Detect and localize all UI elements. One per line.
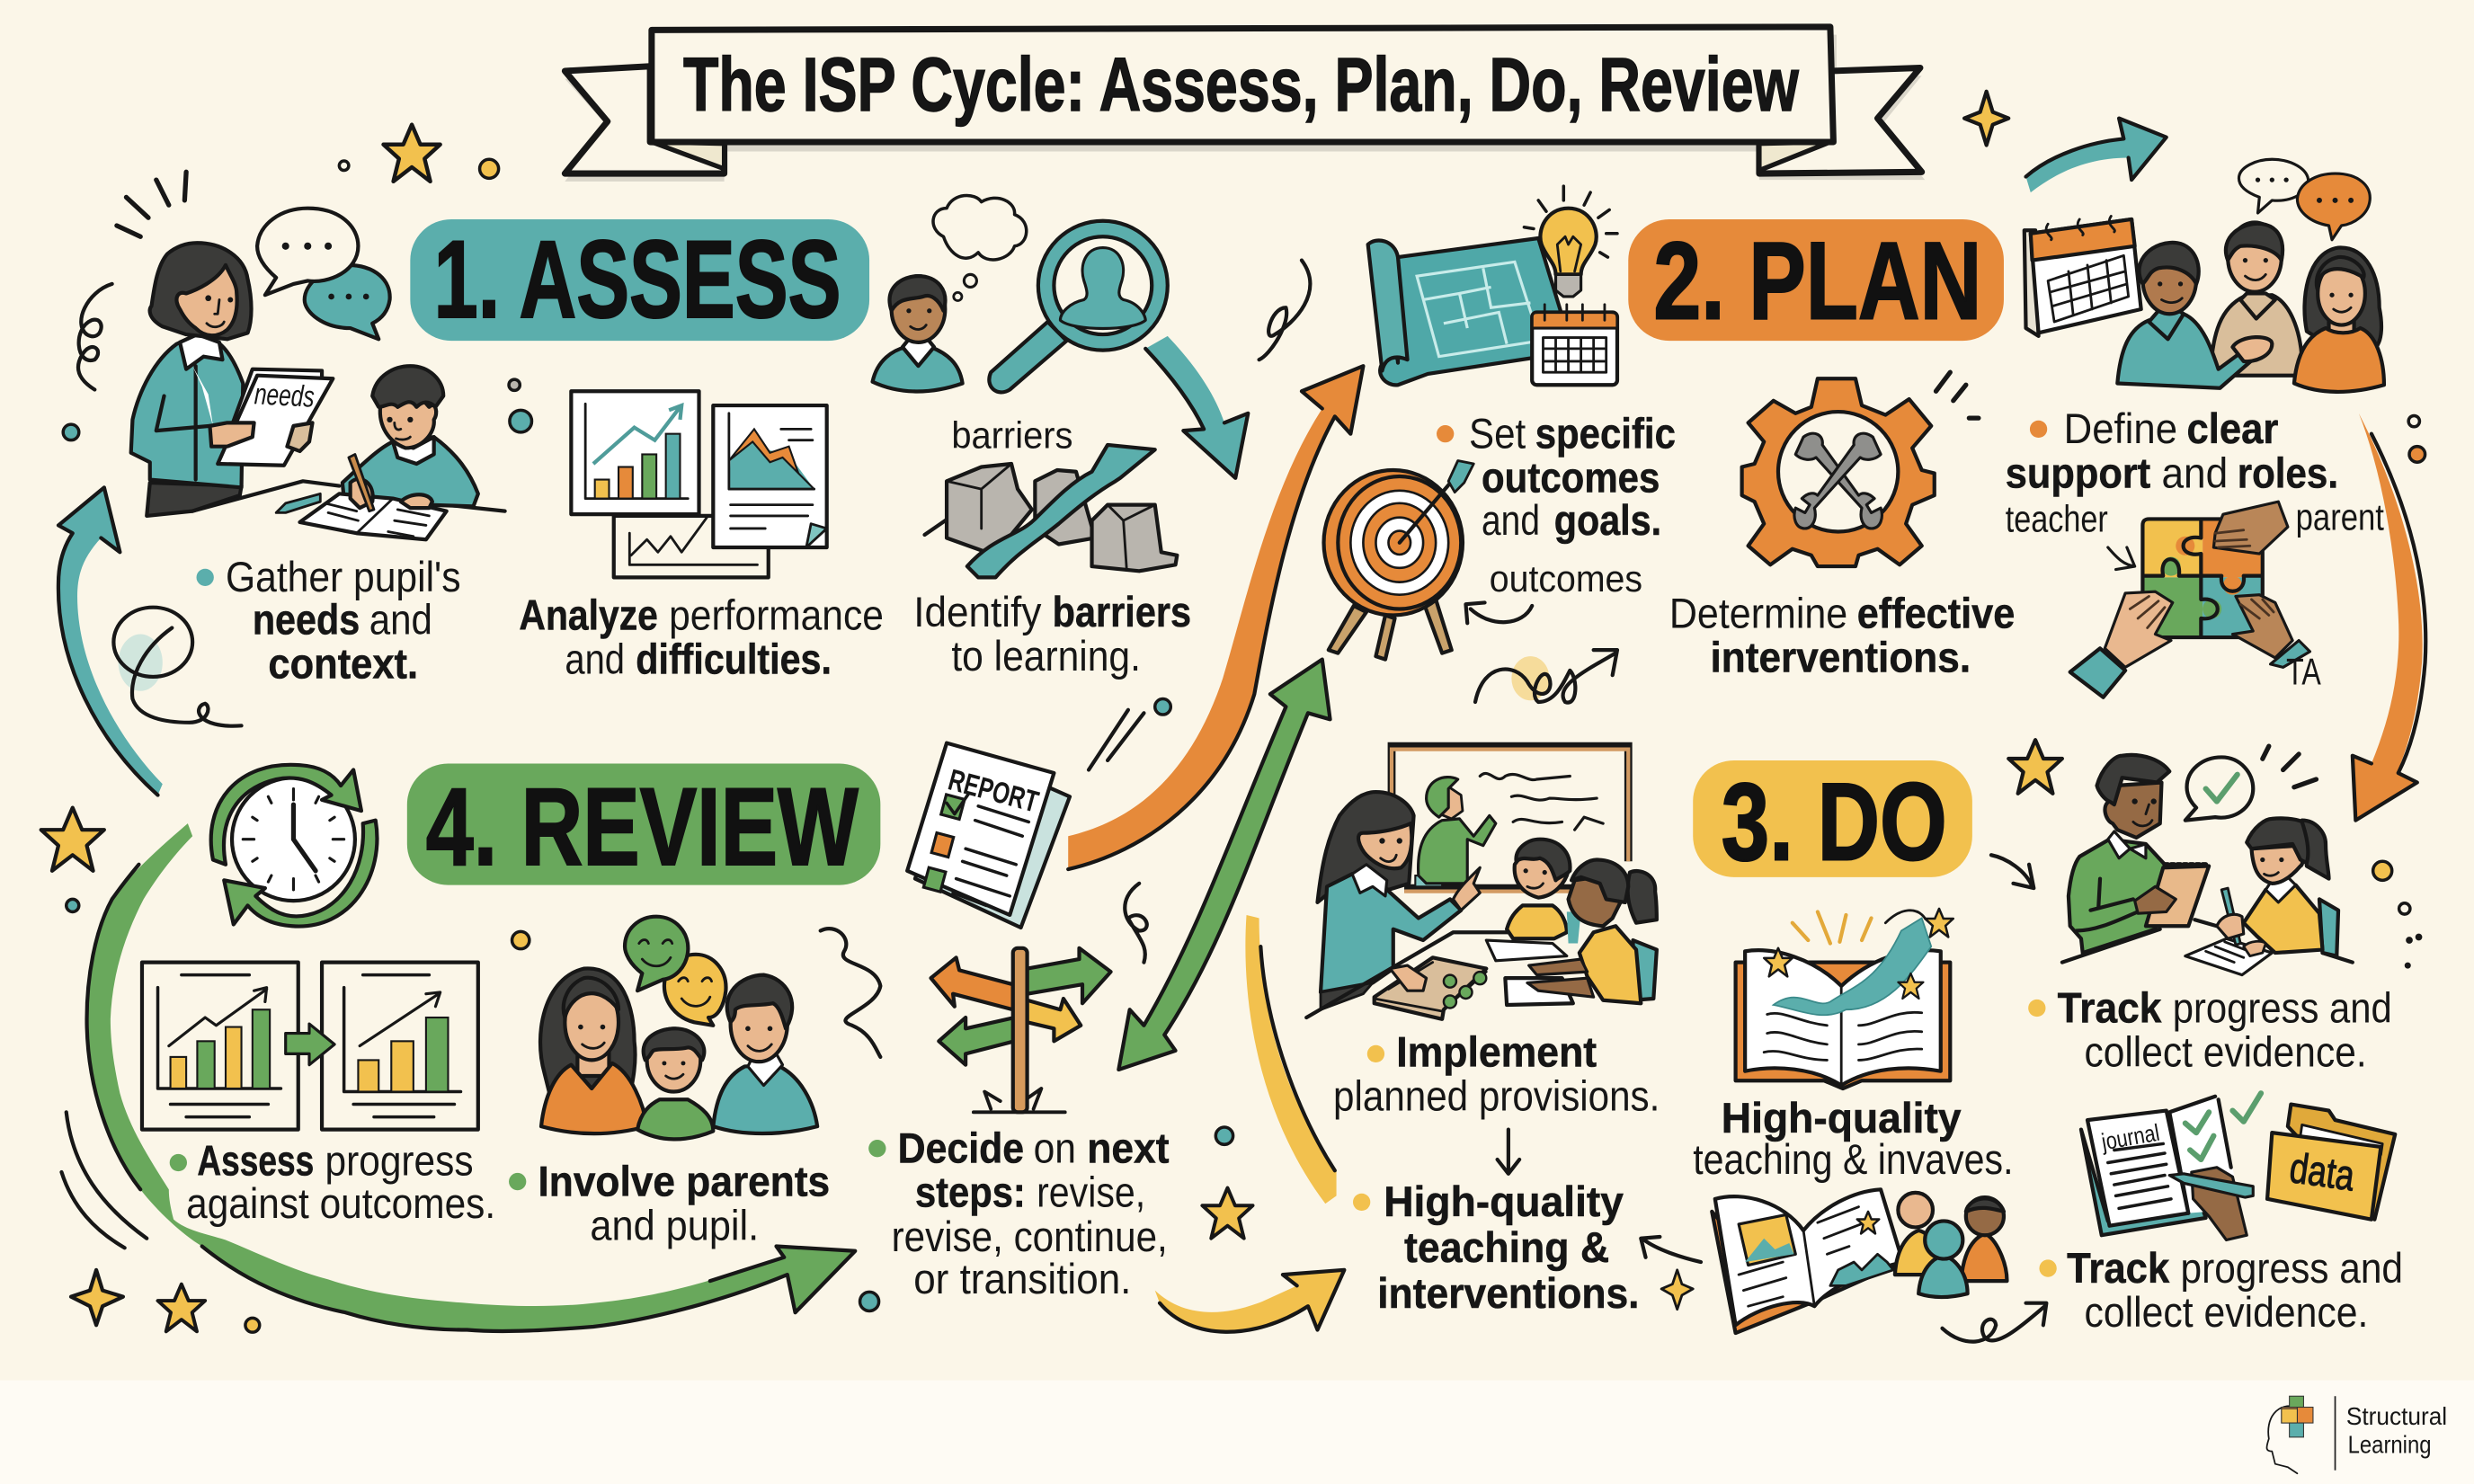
text: high-quality teaching: teaching & invaves. (1693, 1136, 2013, 1184)
text: identify barriers: Identify (913, 589, 1042, 636)
squiggle with arrow (1475, 650, 1617, 703)
icon: before and after charts (142, 963, 478, 1130)
text: high-quality teaching (1693, 1095, 2013, 1184)
icon: family with smiling bubbles (540, 917, 817, 1139)
text: set outcomes: outcomes (1490, 557, 1642, 600)
text: define support and roles: support (2006, 449, 2150, 497)
text: track progress lower: collect evidence. (2084, 1289, 2368, 1337)
text: set outcomes: Set (1469, 410, 1526, 458)
text: gather needs: needs (253, 597, 360, 644)
icon: report papers: REPORT (945, 764, 1042, 820)
text: define support and roles: and (2161, 449, 2228, 497)
text: identify barriers: to learning. (951, 633, 1141, 680)
text: analyze performance: performance (669, 591, 884, 639)
text: assess progress (170, 1138, 495, 1228)
title banner (565, 27, 1925, 182)
icon: check speech bubble (2185, 757, 2253, 821)
text: define support and roles: clear (2187, 405, 2278, 453)
text: define support and roles: roles. (2238, 449, 2338, 497)
text: track progress lower: Track (2067, 1245, 2170, 1293)
icon: teacher with needs paper: needs (254, 378, 316, 414)
icon: group of three pupils (1895, 1193, 2007, 1297)
text: track progress upper: Track (2058, 984, 2162, 1032)
icon: puzzle with hands: TA (2286, 651, 2321, 693)
small arrows (1465, 547, 2135, 1342)
icon: data folder (2267, 1105, 2395, 1220)
icon: magnifying glass on person (989, 221, 1168, 392)
text: involve parents: Involve parents (538, 1158, 830, 1205)
text: decide next steps (868, 1124, 1170, 1303)
text: assess progress: Assess (197, 1138, 314, 1186)
arrow: review to assess (teal) (58, 487, 163, 795)
icon: journal with checks: journal (2099, 1119, 2161, 1156)
text: identify barriers: barriers (951, 413, 1072, 456)
text: determine interventions (1669, 591, 2015, 682)
heading: 3. DO: 3. DO (1722, 761, 1947, 884)
text: involve parents (509, 1158, 830, 1249)
text: analyze performance: Analyze (519, 591, 658, 639)
text: implement and high-quality: High-quality (1384, 1178, 1624, 1226)
text: decide next steps: next (1087, 1124, 1170, 1172)
text: set outcomes: and (1482, 497, 1540, 545)
text: set outcomes: goals. (1554, 497, 1661, 545)
text: involve parents: and pupil. (590, 1202, 759, 1249)
icon: target with arrow (1324, 460, 1473, 660)
arrow: small yellow sweep (1155, 1270, 1344, 1332)
icon: signpost (931, 948, 1111, 1112)
text: decide next steps: revise, (1037, 1169, 1145, 1217)
icon: open storybook (1736, 909, 1953, 1089)
icon: clock with cycle arrows (211, 765, 377, 927)
heading: 4. REVIEW: 4. REVIEW (426, 766, 859, 889)
icon: three adults planning (2117, 222, 2384, 392)
icon: speech bubbles (257, 209, 390, 339)
text: assess progress: progress (325, 1138, 474, 1186)
swirl doodle (113, 608, 242, 726)
icon: journal with checks (2081, 1093, 2261, 1240)
title banner: The ISP Cycle: Assess, Plan, Do, Review (683, 42, 1799, 127)
text: decide next steps: or transition. (913, 1256, 1131, 1303)
logo: Structural Learning: Learning (2348, 1430, 2432, 1458)
text: high-quality teaching: High-quality (1722, 1095, 1962, 1142)
text: define support and roles (2006, 405, 2384, 539)
icon: large calendar (2025, 216, 2141, 336)
text: identify barriers: barriers (1053, 589, 1191, 636)
decorative stars (41, 92, 2062, 1331)
icon: barriers rocks with winding arrow (924, 445, 1177, 577)
heading: 2. PLAN: 2. PLAN (1653, 220, 1981, 343)
icon: puzzle with hands (2070, 502, 2321, 698)
text: analyze performance (519, 591, 884, 683)
text: implement and high-quality: teaching & (1404, 1224, 1609, 1272)
icon: light bulb (1524, 186, 1617, 297)
text: analyze performance: and (565, 635, 625, 683)
text: define support and roles: teacher (2006, 497, 2108, 539)
text: determine interventions: Determine (1669, 591, 1847, 638)
footer band (0, 1381, 2474, 1484)
text: assess progress: against outcomes. (186, 1180, 495, 1228)
text: implement and high-quality: interventions. (1377, 1270, 1640, 1318)
text: determine interventions: interventions. (1711, 635, 1971, 682)
text: implement and high-quality: Implement (1396, 1028, 1597, 1076)
heading: 1. ASSESS: 1. ASSESS (434, 218, 841, 342)
icon: report papers (907, 743, 1070, 928)
text: track progress upper: progress and (2173, 984, 2392, 1032)
icon: planning speech bubbles (2238, 159, 2370, 240)
icon: small book with pupils (1712, 1189, 1903, 1333)
text: gather needs: context. (268, 641, 418, 689)
text: implement and high-quality (1333, 1028, 1660, 1318)
text: set outcomes: outcomes (1482, 455, 1660, 502)
text: implement and high-quality: planned provisions. (1333, 1073, 1660, 1121)
text: identify barriers (913, 413, 1191, 680)
text: gather needs (197, 554, 461, 689)
logo: Structural Learning (2267, 1396, 2447, 1473)
text: track progress upper: collect evidence. (2084, 1028, 2367, 1076)
text: determine interventions: effective (1857, 591, 2015, 638)
icon: teacher with needs paper (131, 243, 333, 516)
arrow: review to plan (orange) (1068, 366, 1363, 869)
icon: blueprint (1368, 238, 1573, 385)
icon: pupil writing at desk (192, 366, 505, 539)
logo: Structural Learning: Structural (2346, 1402, 2447, 1430)
arrow: do to review (yellow) (1245, 915, 1337, 1204)
text: define support and roles: parent (2296, 496, 2384, 538)
text: decide next steps: Decide (898, 1124, 1024, 1172)
text: decide next steps: on (1034, 1124, 1076, 1172)
arrow: small teal top right (2026, 119, 2167, 192)
text: decide next steps: steps: (915, 1169, 1026, 1217)
text: decide next steps: revise, continue, (892, 1213, 1168, 1261)
arrow: double-headed green link (1118, 660, 1330, 1070)
text: analyze performance: difficulties. (636, 635, 832, 683)
text: gather needs: and (369, 597, 432, 644)
icon: teacher and pupil tracking progress (2062, 755, 2353, 975)
icon: small calendar (1532, 305, 1617, 385)
icon: classroom scene (1306, 746, 1657, 1019)
text: track progress lower (2039, 1245, 2403, 1337)
icon: pupil thinking (873, 195, 1027, 391)
icon: gear with wrenches (1742, 378, 1935, 566)
arrow: plan to do (orange) (2353, 413, 2425, 821)
text: track progress upper (2028, 984, 2392, 1076)
text: gather needs: Gather pupil's (226, 554, 461, 601)
decorative squiggles (61, 172, 2316, 1248)
text: set outcomes (1437, 410, 1676, 600)
arrow: review loop (green) (87, 823, 855, 1331)
text: define support and roles: Define (2064, 405, 2177, 453)
icon: data folder: data (2287, 1144, 2358, 1201)
text: set outcomes: specific (1535, 410, 1676, 458)
text: track progress lower: progress and (2181, 1245, 2403, 1293)
arrow: assess downward (teal) (1145, 336, 1248, 478)
icon: performance charts (571, 391, 827, 577)
decorative dots (63, 159, 2425, 1332)
